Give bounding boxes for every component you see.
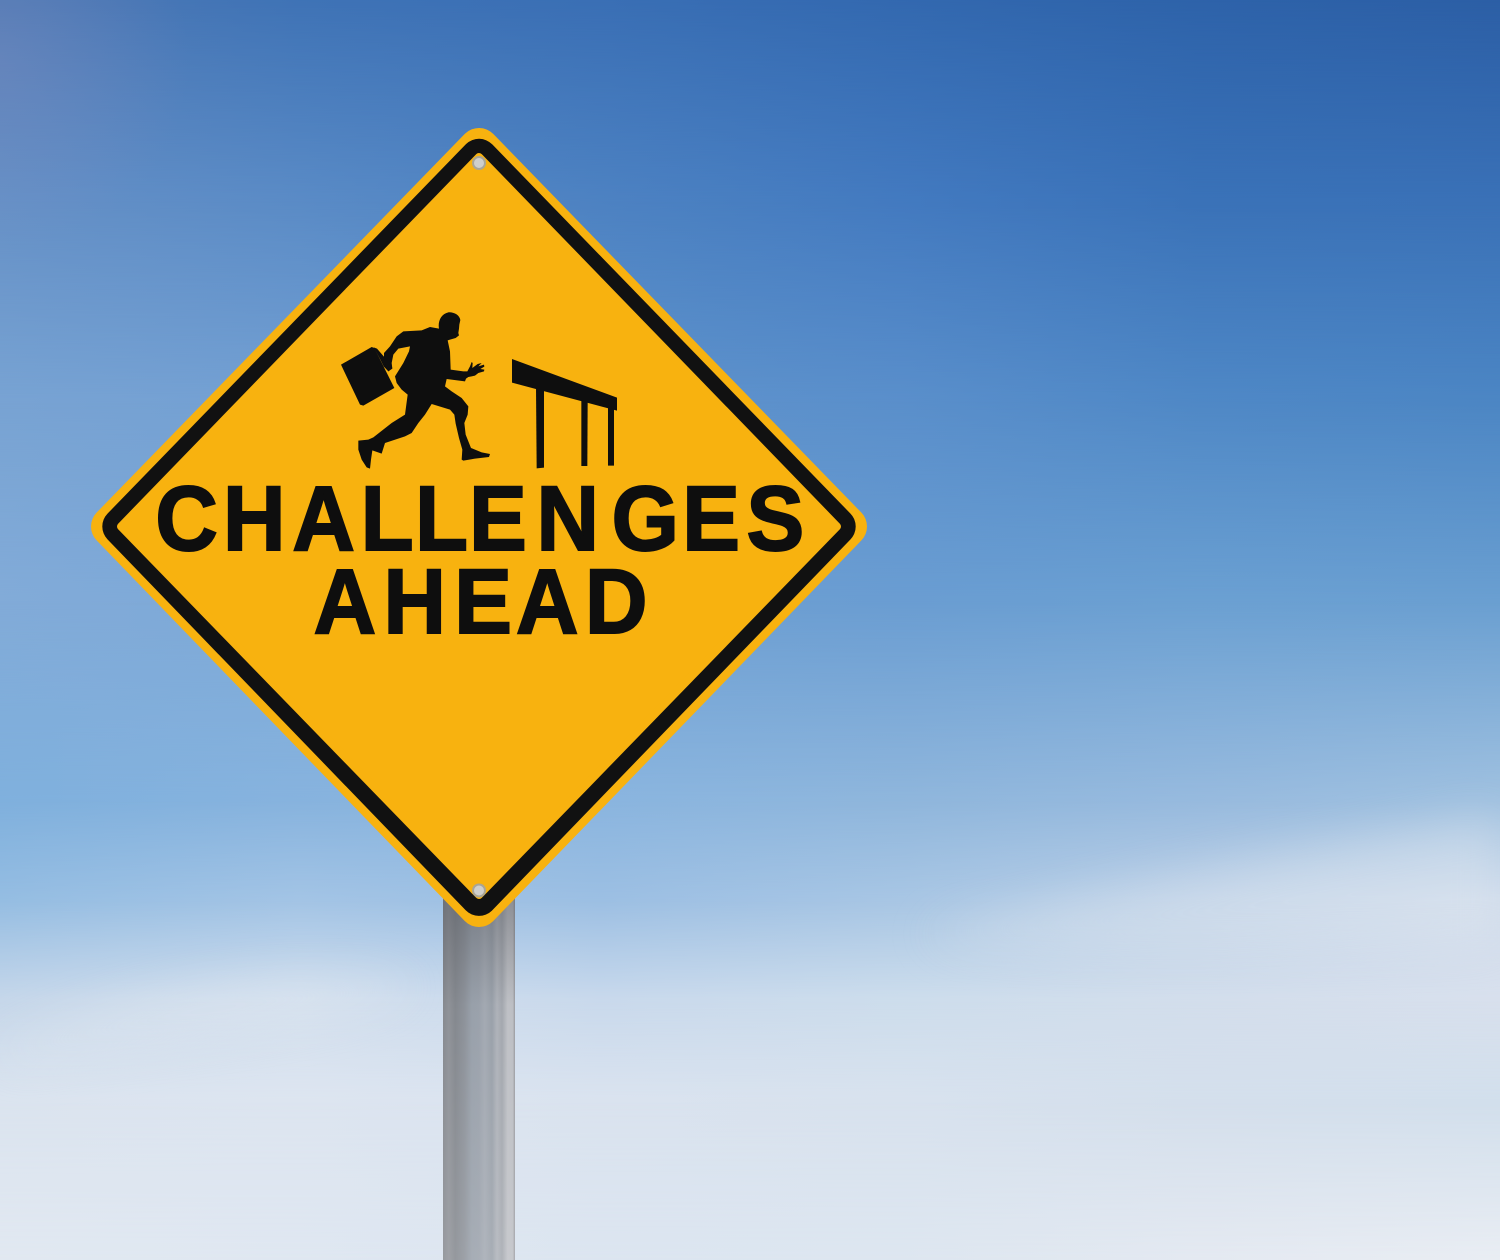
- top bolt: [472, 156, 486, 170]
- sign post: [443, 895, 515, 1260]
- icon: hurdle: [512, 359, 617, 468]
- title line 2: AHEAD: [314, 550, 647, 653]
- bottom bolt: [472, 884, 486, 898]
- title line 1: CHALLENGES: [155, 467, 804, 570]
- icon: running businessman with briefcase: [341, 312, 490, 469]
- road sign: [111, 148, 847, 907]
